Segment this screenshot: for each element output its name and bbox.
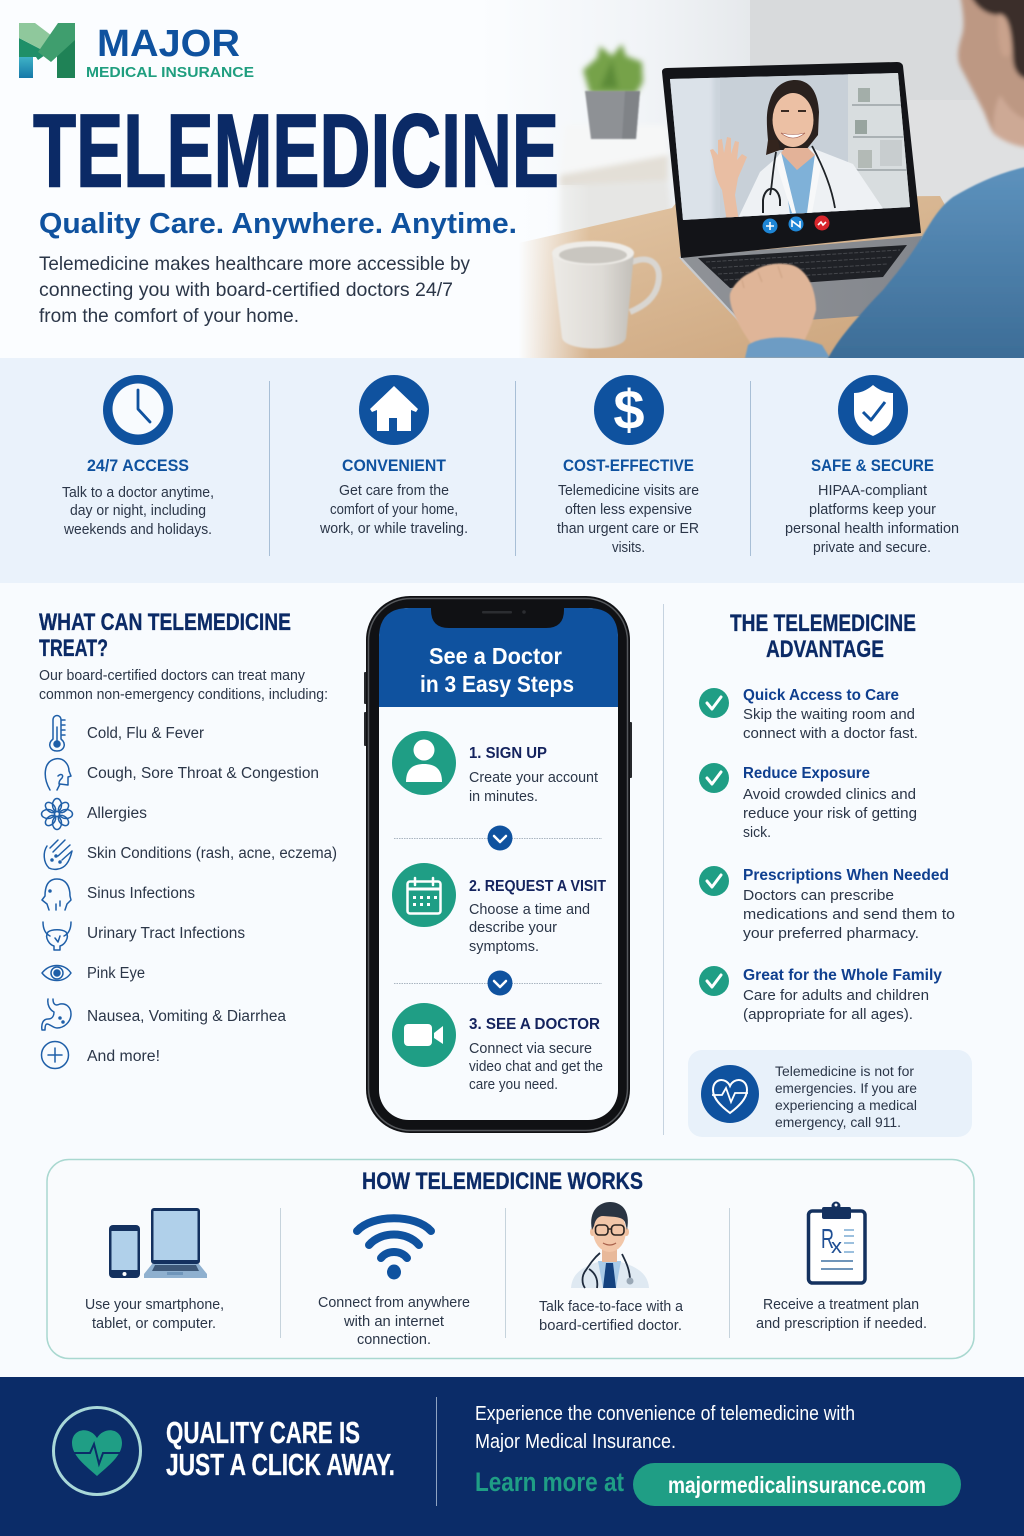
benefit: convenient — [319, 375, 468, 537]
step 2: request a visit: Choose a time and — [469, 902, 590, 918]
icon: check — [699, 763, 729, 793]
step 3: see a doctor: video chat and get the — [469, 1059, 603, 1075]
icon: bladder — [43, 922, 71, 950]
step: connect: with an internet — [343, 1314, 444, 1330]
step 2: request a visit — [392, 863, 606, 955]
step: treatment plan: Receive a treatment plan — [763, 1297, 919, 1313]
condition: allergies — [42, 798, 147, 830]
condition: stomach — [42, 999, 286, 1030]
intro: common non-emergency conditions, including: — [39, 687, 328, 703]
advantage: reduce exposure: Avoid crowded clinics and — [743, 787, 916, 803]
benefit: 24/7 access: weekends and holidays. — [63, 522, 212, 538]
step: talk to doctor: Talk face-to-face with a — [539, 1299, 684, 1315]
benefit: 24/7 access: 24/7 ACCESS — [87, 457, 189, 475]
step: devices: tablet, or computer. — [92, 1316, 216, 1332]
coffee mug — [552, 241, 659, 348]
step 3: see a doctor: care you need. — [469, 1077, 558, 1093]
person seen from behind: shoulder and head — [827, 0, 1024, 360]
intro — [39, 668, 328, 703]
laptop — [662, 62, 922, 328]
benefit: safe and secure: HIPAA-compliant — [818, 483, 927, 499]
benefit: 24/7 access: day or night, including — [70, 503, 206, 519]
advantage: reduce exposure: sick. — [743, 825, 771, 841]
icon: dollar sign — [594, 375, 664, 445]
icon: heart with pulse — [54, 1408, 140, 1494]
icon: eye — [42, 966, 71, 980]
heading: WHAT CAN TELEMEDICINE — [39, 609, 291, 636]
step: treatment plan — [756, 1202, 927, 1332]
advantage: prescriptions: your preferred pharmacy. — [743, 926, 919, 942]
potted plant — [583, 44, 643, 139]
slogan: JUST A CLICK AWAY. — [166, 1447, 395, 1482]
condition: stomach: Nausea, Vomiting & Diarrhea — [87, 1008, 286, 1025]
icon: phone, tablet and laptop — [109, 1208, 207, 1278]
icon: stomach — [42, 999, 71, 1030]
condition: pink eye — [42, 965, 145, 982]
benefit: cost-effective: Telemedicine visits are — [558, 483, 699, 499]
advantage: whole family: Great for the Whole Family — [743, 967, 942, 984]
condition: skin: Skin Conditions (rash, acne, eczema) — [87, 845, 337, 862]
icon: check — [699, 866, 729, 896]
phone heading — [420, 643, 574, 697]
icon: hand with rash — [44, 840, 72, 869]
benefit: cost-effective: visits. — [612, 540, 645, 556]
callout: not for emergencies — [688, 1050, 972, 1137]
phone heading: See a Doctor — [429, 643, 562, 669]
step 3: see a doctor: 3. SEE A DOCTOR — [469, 1016, 600, 1033]
benefit: cost-effective: than urgent care or ER — [557, 521, 699, 537]
advantage: prescriptions — [699, 866, 955, 942]
icon: video camera — [392, 1003, 456, 1067]
step: connect: connection. — [357, 1332, 431, 1348]
arrow: step 2 to 3 — [394, 970, 602, 996]
icon: heart with pulse — [701, 1065, 759, 1123]
icon: person — [392, 731, 456, 795]
icon: flower — [42, 798, 72, 830]
benefit: cost-effective: COST-EFFECTIVE — [563, 457, 694, 475]
wooden desk — [524, 196, 945, 358]
advantage: reduce exposure — [699, 763, 917, 841]
step: connect: Connect from anywhere — [318, 1295, 470, 1311]
icon: prescription clipboard: x — [831, 1236, 842, 1258]
step 1: sign up: 1. SIGN UP — [469, 745, 547, 762]
call to action text: Learn more at — [475, 1467, 624, 1497]
condition: and more: And more! — [87, 1048, 160, 1065]
benefit: 24/7 access — [62, 375, 214, 538]
benefit: convenient: work, or while traveling. — [319, 521, 468, 537]
panel: how telemedicine works — [47, 1160, 974, 1358]
doctor on screen — [710, 80, 884, 225]
call to action text: Major Medical Insurance. — [475, 1431, 676, 1453]
heading: HOW TELEMEDICINE WORKS — [362, 1168, 643, 1195]
icon: shield — [838, 375, 908, 445]
condition: sinus: Sinus Infections — [87, 885, 195, 902]
icon: dollar sign: $ — [613, 378, 645, 441]
typing hand — [730, 264, 816, 345]
advantage: whole family — [699, 966, 942, 1023]
benefit: convenient: Get care from the — [339, 483, 449, 499]
benefit: safe and secure: private and secure. — [813, 540, 931, 556]
tagline: Quality Care. Anywhere. Anytime. — [39, 208, 517, 240]
logo: Major Medical Insurance — [19, 23, 254, 81]
panel: benefits band — [0, 358, 1024, 583]
advantage: quick access: Skip the waiting room and — [743, 707, 915, 723]
condition: urinary tract — [43, 922, 245, 950]
call buttons — [762, 216, 830, 234]
callout: not for emergencies: experiencing a medical — [775, 1098, 917, 1113]
footer banner — [0, 1377, 1024, 1536]
benefit: safe and secure: personal health information — [785, 521, 959, 537]
condition: and more — [42, 1042, 160, 1068]
condition: cold and flu — [50, 716, 204, 751]
step 2: request a visit: symptoms. — [469, 939, 539, 955]
callout: not for emergencies: emergency, call 911. — [775, 1115, 901, 1130]
advantage: whole family: Care for adults and children — [743, 988, 929, 1004]
icon: doctor illustration — [571, 1202, 649, 1288]
condition: skin — [44, 840, 337, 869]
heading: THE TELEMEDICINE — [730, 610, 916, 637]
step: talk to doctor: board-certified doctor. — [539, 1318, 682, 1334]
step 1: sign up: Create your account — [469, 770, 598, 786]
logo: Major Medical Insurance: MAJOR — [97, 23, 240, 65]
icon: prescription clipboard — [808, 1202, 865, 1283]
icon: calendar — [392, 863, 456, 927]
callout: not for emergencies: Telemedicine is not for — [775, 1064, 915, 1079]
icon: plus in circle — [42, 1042, 68, 1068]
condition: allergies: Allergies — [87, 805, 147, 822]
step: treatment plan: and prescription if needed. — [756, 1316, 927, 1332]
step 3: see a doctor: Connect via secure — [469, 1041, 592, 1057]
phone: see a doctor in 3 easy steps — [364, 596, 632, 1133]
icon: prescription clipboard: R — [821, 1223, 834, 1254]
panel: what can telemedicine treat — [39, 609, 337, 1068]
advantage: prescriptions: medications and send them to — [743, 907, 955, 923]
icon: clock — [103, 375, 173, 445]
heading — [730, 610, 916, 663]
intro text: from the comfort of your home. — [39, 305, 299, 327]
laptop lid — [662, 62, 921, 258]
advantage: quick access: Quick Access to Care — [743, 687, 899, 704]
icon: check — [699, 688, 729, 718]
step: devices: Use your smartphone, — [85, 1297, 224, 1313]
call to action text — [475, 1403, 855, 1497]
condition: cold and flu: Cold, Flu & Fever — [87, 725, 204, 742]
benefit: safe and secure: SAFE & SECURE — [811, 457, 934, 475]
intro: Our board-certified doctors can treat many — [39, 668, 306, 684]
step: talk to doctor — [539, 1202, 684, 1334]
advantage: reduce exposure: Reduce Exposure — [743, 765, 870, 782]
step: devices — [85, 1208, 224, 1332]
advantage: reduce exposure: reduce your risk of getting — [743, 806, 917, 822]
condition: cough and sore throat — [45, 759, 319, 790]
callout: not for emergencies: emergencies. If you are — [775, 1081, 917, 1096]
logo mark — [19, 23, 75, 78]
condition: cough and sore throat: Cough, Sore Throat & Congestion — [87, 765, 319, 782]
arrow: step 1 to 2 — [394, 826, 602, 850]
step 2: request a visit: 2. REQUEST A VISIT — [469, 878, 606, 895]
condition: urinary tract: Urinary Tract Infections — [87, 925, 245, 942]
website button: majormedicalinsurance.com — [668, 1472, 926, 1498]
benefit: cost-effective: often less expensive — [565, 502, 692, 518]
slogan — [166, 1415, 395, 1482]
condition: pink eye: Pink Eye — [87, 965, 145, 982]
logo: Major Medical Insurance: MEDICAL INSURANCE — [86, 65, 254, 81]
benefit: cost-effective — [557, 375, 699, 556]
phone heading: in 3 Easy Steps — [420, 671, 574, 697]
icon: face front — [42, 879, 71, 910]
advantage: prescriptions: Doctors can prescribe — [743, 888, 894, 904]
title: TELEMEDICINE — [33, 94, 559, 210]
benefit: convenient: CONVENIENT — [342, 457, 446, 475]
heading: TREAT? — [39, 635, 108, 662]
step 1: sign up — [392, 731, 598, 805]
hero photo: telehealth video call on a laptop — [524, 0, 1024, 358]
website button — [633, 1463, 961, 1506]
intro text: connecting you with board-certified doctors 24/7 — [39, 279, 453, 301]
advantage: quick access — [699, 687, 918, 742]
benefit: safe and secure — [785, 375, 959, 556]
panel: the telemedicine advantage — [664, 604, 972, 1137]
step 3: see a doctor — [392, 1003, 603, 1093]
laptop base and keyboard — [680, 236, 922, 325]
sleeve cuff — [745, 337, 830, 358]
icon: thermometer — [50, 716, 65, 751]
step 1: sign up: in minutes. — [469, 789, 538, 805]
slogan: QUALITY CARE IS — [166, 1415, 360, 1450]
call to action text: Experience the convenience of telemedicine with — [475, 1403, 855, 1425]
advantage: prescriptions: Prescriptions When Needed — [743, 867, 949, 884]
condition: sinus — [42, 879, 195, 910]
icon: wifi — [357, 1218, 431, 1280]
window sill — [558, 155, 671, 233]
step 2: request a visit: describe your — [469, 920, 557, 936]
step: connect — [318, 1218, 470, 1348]
intro text: Telemedicine makes healthcare more accessible by — [39, 253, 470, 275]
benefit: safe and secure: platforms keep your — [809, 502, 936, 518]
advantage: whole family: (appropriate for all ages). — [743, 1007, 913, 1023]
benefit: convenient: comfort of your home, — [330, 502, 458, 518]
icon: check — [699, 966, 729, 996]
benefit: 24/7 access: Talk to a doctor anytime, — [62, 485, 214, 501]
icon: house — [359, 375, 429, 445]
heading: ADVANTAGE — [766, 636, 884, 663]
advantage: quick access: connect with a doctor fast. — [743, 726, 918, 742]
intro text — [39, 253, 470, 327]
heading — [39, 609, 291, 662]
icon: head with throat — [45, 759, 71, 790]
